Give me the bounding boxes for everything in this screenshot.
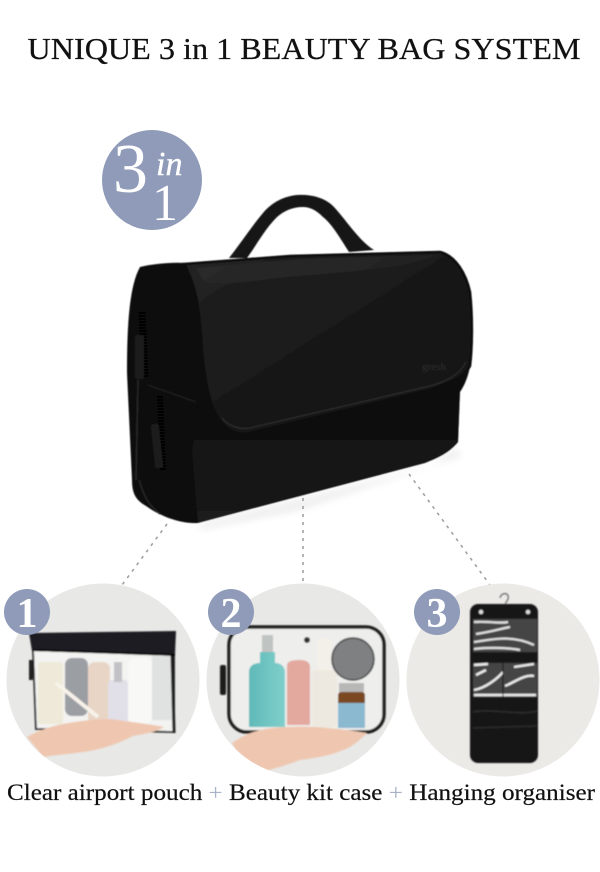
number badge 1 xyxy=(4,589,50,637)
badge: 3 in 1 xyxy=(102,130,202,232)
badge: 3 in 1: 3 xyxy=(113,131,148,208)
panel: clear airport pouch xyxy=(6,584,200,776)
side zipper lower xyxy=(148,385,196,402)
title: UNIQUE 3 in 1 BEAUTY BAG SYSTEM xyxy=(28,31,580,66)
badge: 3 in 1: in xyxy=(156,146,182,183)
caption row: Clear airport pouch + Beauty kit case + Hanging organiser xyxy=(7,780,595,805)
pouch tape xyxy=(56,683,98,717)
product photo: black beauty bag xyxy=(127,195,472,530)
pouch top band xyxy=(29,631,176,655)
amber jar xyxy=(337,691,366,704)
logo: gresh xyxy=(422,361,446,373)
clear pocket top xyxy=(473,619,537,652)
grey round compact xyxy=(332,638,374,680)
pouch bottles xyxy=(38,662,63,724)
number badge 2 xyxy=(208,589,254,637)
number badge 3: 3 xyxy=(426,591,448,637)
hand xyxy=(232,727,367,775)
case outline xyxy=(229,627,384,732)
organiser body xyxy=(470,604,538,763)
number badge 1: 1 xyxy=(16,591,38,637)
zipper line xyxy=(33,650,175,655)
panel: beauty kit case xyxy=(206,584,400,776)
lower black pocket xyxy=(473,711,537,713)
bag handle xyxy=(229,195,374,258)
bag silhouette xyxy=(127,252,472,523)
side highlight xyxy=(136,380,160,514)
flap stitching edge xyxy=(222,362,466,429)
bag front lower panel xyxy=(192,380,460,523)
pink bottle xyxy=(287,660,310,725)
hanger hook xyxy=(500,594,508,610)
flap light sheen xyxy=(196,255,436,283)
hand xyxy=(27,719,164,757)
side zipper upper xyxy=(142,312,145,378)
zipper pull xyxy=(29,660,33,680)
pouch right trim xyxy=(172,655,174,733)
panel: hanging organiser xyxy=(406,584,600,776)
number badge 3 xyxy=(414,589,460,637)
clear pockets middle xyxy=(473,663,537,697)
number badge 2: 2 xyxy=(220,591,242,637)
bag flap xyxy=(184,252,472,434)
bag shadow xyxy=(200,448,462,530)
pouch clear body xyxy=(33,650,174,732)
eyelets xyxy=(479,610,483,614)
case dot xyxy=(304,637,310,643)
badge: 3 in 1: 1 xyxy=(152,175,178,232)
teal bottle xyxy=(249,652,285,727)
white spray bottle xyxy=(312,670,337,728)
dotted connector lines xyxy=(122,474,490,585)
case zipper pull xyxy=(220,665,226,695)
